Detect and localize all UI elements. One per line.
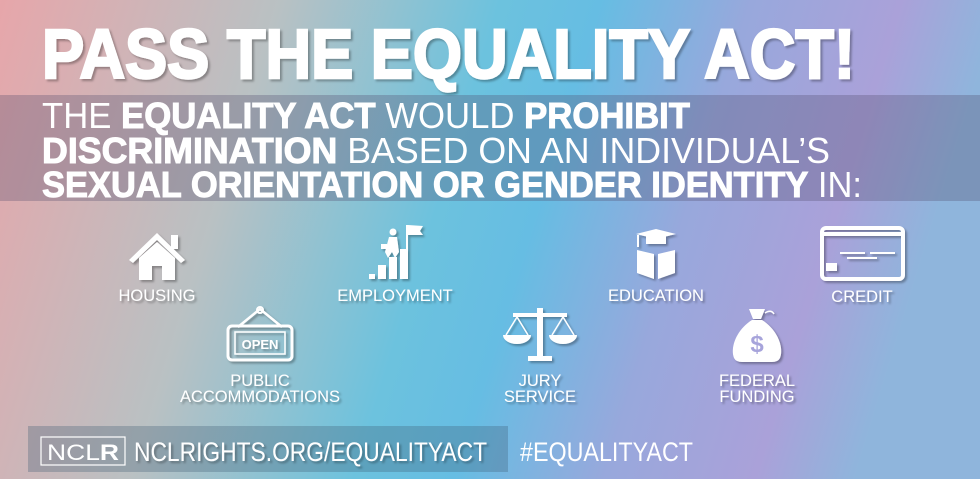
- icon: credit card: [822, 228, 903, 279]
- item: federal funding: FEDERAL: [719, 372, 795, 390]
- item: federal funding: [719, 309, 795, 406]
- item: housing: [118, 233, 196, 305]
- icon: stairs and flag: [369, 225, 423, 279]
- item: education: [608, 229, 704, 305]
- hashtag: #EQUALITYACT: [520, 437, 693, 467]
- title: PASS THE EQUALITY ACT!: [42, 15, 855, 93]
- footer: website box: [28, 426, 508, 472]
- subtitle band: [0, 95, 980, 205]
- item: jury service: JURY: [519, 372, 561, 390]
- icon: book with graduation cap: [636, 229, 676, 279]
- item: public accommodations: ACCOMMODATIONS: [180, 388, 340, 406]
- item: employment: EMPLOYMENT: [337, 287, 453, 305]
- item: employment: [337, 225, 453, 305]
- icon: house: [129, 233, 185, 280]
- subtitle line 1: THE EQUALITY ACT WOULD PROHIBIT: [42, 95, 690, 136]
- item: federal funding: FUNDING: [719, 388, 795, 406]
- item: credit: CREDIT: [831, 288, 893, 306]
- item: housing: HOUSING: [118, 287, 196, 305]
- item: jury service: [503, 308, 577, 406]
- logo: NCLR: NCL R: [47, 440, 119, 465]
- website url: NCLRIGHTS.ORG/EQUALITYACT: [134, 437, 487, 467]
- subtitle line 3: SEXUAL ORIENTATION OR GENDER IDENTITY IN:: [42, 164, 862, 205]
- subtitle line 2: DISCRIMINATION BASED ON AN INDIVIDUAL’S: [42, 130, 830, 171]
- icon: money bag: $: [750, 331, 764, 358]
- item: public accommodations: PUBLIC: [230, 372, 290, 390]
- icon: open sign: [228, 307, 292, 360]
- item: public accommodations: [180, 307, 340, 406]
- icon: open sign: OPEN: [242, 337, 278, 352]
- item: credit: [822, 228, 903, 306]
- item: education: EDUCATION: [608, 287, 704, 305]
- icon: scales of justice: [503, 308, 577, 361]
- item: jury service: SERVICE: [504, 388, 576, 406]
